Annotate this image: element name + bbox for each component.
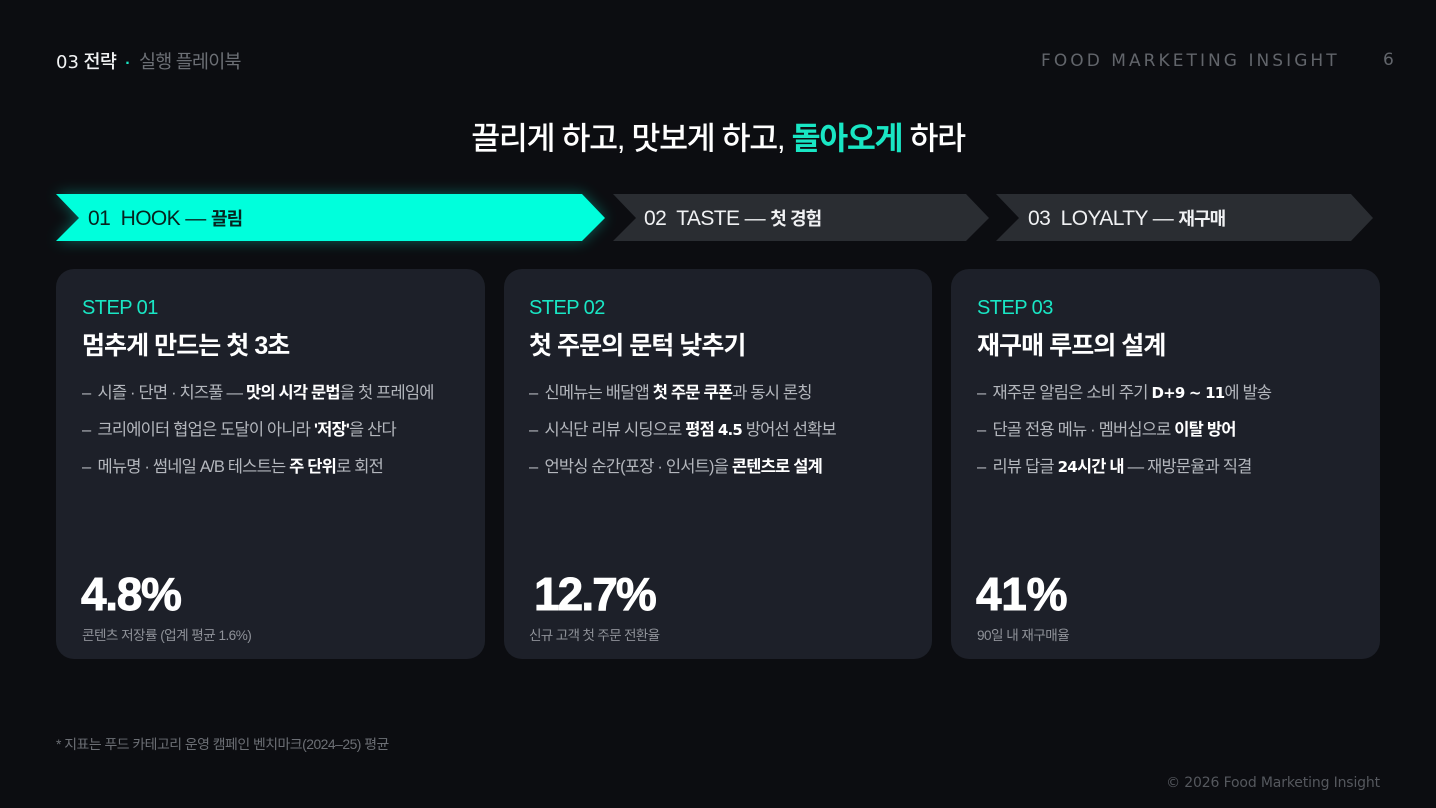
process chevrons	[54, 186, 1373, 250]
step label: STEP 01	[82, 297, 158, 319]
step label: STEP 03	[977, 297, 1053, 319]
bullet 3: –	[82, 458, 90, 476]
bullet 2: –	[82, 421, 90, 439]
title: 끌리게 하고, 맛보게 하고, 돌아오게 하라	[471, 120, 965, 156]
card heading: 재구매 루프의 설계	[977, 332, 1165, 360]
metric caption: 신규 고객 첫 주문 전환율	[529, 628, 659, 643]
bullet 2: 크리에이터 협업은 도달이 아니라 '저장'을 산다	[98, 421, 396, 439]
metric caption: 90일 내 재구매율	[977, 628, 1069, 643]
bullet 2: 단골 전용 메뉴 · 멤버십으로 이탈 방어	[992, 421, 1236, 439]
page number: 6	[1383, 50, 1394, 70]
bullet 1: –	[82, 384, 90, 402]
chevron label: hook: 01 HOOK — 끌림	[88, 207, 242, 230]
copyright: © 2026 Food Marketing Insight	[1166, 775, 1380, 791]
panel: step 03	[951, 269, 1380, 659]
bullet 2: 시식단 리뷰 시딩으로 평점 4.5 방어선 선확보	[544, 421, 836, 439]
card heading: 멈추게 만드는 첫 3초	[82, 332, 289, 360]
bullet 3: –	[529, 458, 537, 476]
metric: 41%	[976, 568, 1067, 620]
panel: step 02	[504, 269, 932, 659]
step label: STEP 02	[529, 297, 605, 319]
bullet 1: 재주문 알림은 소비 주기 D+9 ~ 11에 발송	[992, 384, 1271, 402]
chevron label: taste: 02 TASTE — 첫 경험	[644, 207, 821, 230]
chevron label: loyalty: 03 LOYALTY — 재구매	[1028, 207, 1225, 230]
metric: 4.8%	[81, 568, 181, 620]
bullet 2: –	[529, 421, 537, 439]
bullet 1: –	[977, 384, 985, 402]
metric caption: 콘텐츠 저장률 (업계 평균 1.6%)	[82, 628, 251, 643]
bullet 1: 신메뉴는 배달앱 첫 주문 쿠폰과 동시 론칭	[544, 384, 812, 402]
bullet 2: –	[977, 421, 985, 439]
bullet 3: 리뷰 답글 24시간 내 — 재방문율과 직결	[992, 458, 1252, 476]
bullet 1: –	[529, 384, 537, 402]
brand name: FOOD MARKETING INSIGHT	[1041, 51, 1340, 71]
card heading: 첫 주문의 문턱 낮추기	[529, 332, 745, 360]
bullet 3: –	[977, 458, 985, 476]
bullet 3: 언박싱 순간(포장 · 인서트)을 콘텐츠로 설계	[544, 458, 822, 476]
bullet 3: 메뉴명 · 썸네일 A/B 테스트는 주 단위로 회전	[98, 458, 383, 476]
section label: 03 전략 · 실행 플레이북	[56, 51, 241, 73]
metric: 12.7%	[534, 568, 655, 620]
bullet 1: 시즐 · 단면 · 치즈풀 — 맛의 시각 문법을 첫 프레임에	[98, 384, 434, 402]
panel: step 01	[56, 269, 485, 659]
footnote: * 지표는 푸드 카테고리 운영 캠페인 벤치마크(2024–25) 평균	[56, 736, 389, 752]
